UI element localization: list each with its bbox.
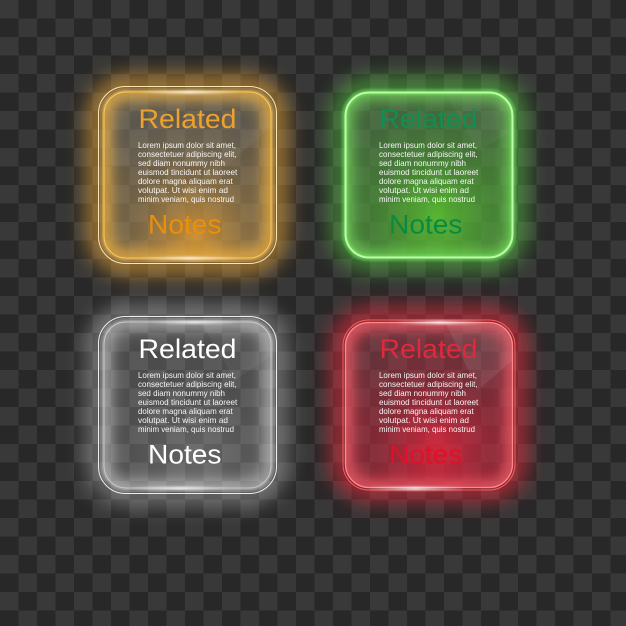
heading: Notes: Notes [148,440,222,470]
text block: body copy [138,370,238,434]
text block: body copy [138,140,238,204]
text block: body copy: Lorem ipsum dolor sit amet, [379,140,477,150]
text block: body copy: minim veniam, quis nostrud [379,194,475,204]
text block: body copy: euismod tincidunt ut laoreet [138,397,238,407]
panel: orange card [98,86,276,264]
text block: body copy: minim veniam, quis nostrud [138,424,234,434]
text block: body copy: consectetuer adipiscing elit, [379,149,478,159]
heading: Notes: Notes [389,440,462,470]
text block: body copy: euismod tincidunt ut laoreet [379,397,479,407]
text block: body copy: euismod tincidunt ut laoreet [379,167,479,177]
text block: body copy: minim veniam, quis nostrud [138,194,234,204]
panel: green card [342,88,516,260]
text block: body copy: sed diam nonummy nibh [379,158,466,168]
text block: body copy: sed diam nonummy nibh [138,158,225,168]
text block: body copy [379,370,479,434]
heading: Related: Related [138,334,236,364]
heading: Related: Related [380,334,478,364]
text block: body copy: volutpat. Ut wisi enim ad [379,185,469,195]
text block: body copy: Lorem ipsum dolor sit amet, [138,140,236,150]
text block: body copy: volutpat. Ut wisi enim ad [138,415,228,425]
text block: body copy: dolore magna aliquam erat [379,406,474,416]
text block: body copy: Lorem ipsum dolor sit amet, [138,370,236,380]
text block: body copy: Lorem ipsum dolor sit amet, [379,370,477,380]
text block: body copy: dolore magna aliquam erat [379,176,474,186]
panel: white card [98,316,276,494]
text block: body copy: dolore magna aliquam erat [138,176,233,186]
text block: body copy: volutpat. Ut wisi enim ad [138,185,228,195]
heading: Notes: Notes [389,210,462,240]
heading: Related: Related [138,104,236,134]
text block: body copy: volutpat. Ut wisi enim ad [379,415,469,425]
panel: red card [342,318,516,490]
text block: body copy: sed diam nonummy nibh [138,388,225,398]
text block: body copy: consectetuer adipiscing elit, [138,149,237,159]
text block: body copy: consectetuer adipiscing elit, [379,379,478,389]
text block: body copy: sed diam nonummy nibh [379,388,466,398]
text block: body copy [379,140,479,204]
text block: body copy: euismod tincidunt ut laoreet [138,167,238,177]
text block: body copy: minim veniam, quis nostrud [379,424,475,434]
text block: body copy: dolore magna aliquam erat [138,406,233,416]
heading: Notes: Notes [148,210,222,240]
heading: Related: Related [380,104,478,134]
text block: body copy: consectetuer adipiscing elit, [138,379,237,389]
